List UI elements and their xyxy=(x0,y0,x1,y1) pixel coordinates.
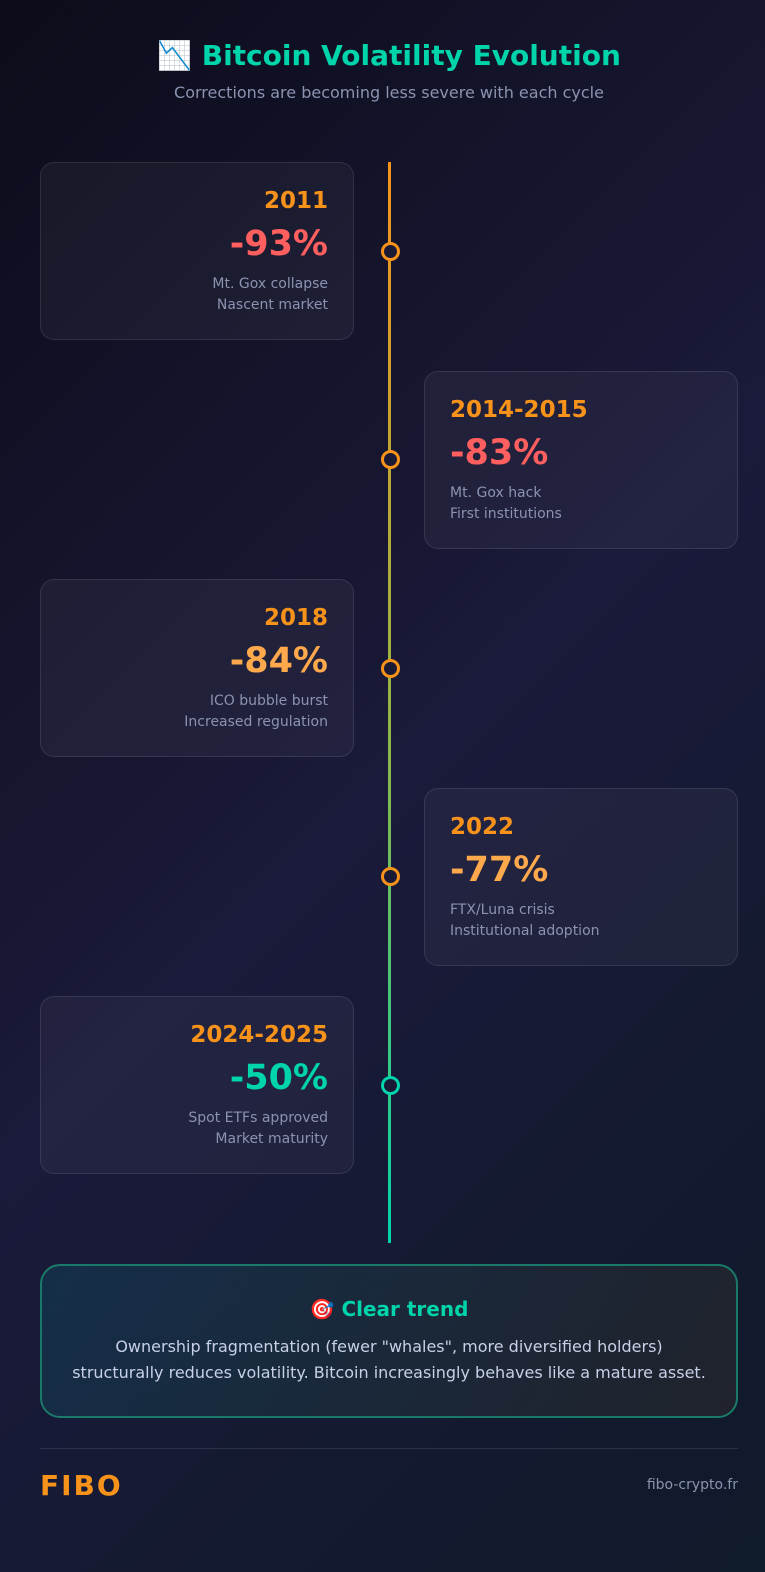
card: 2014-2015: First institutions xyxy=(450,506,562,522)
card: 2024-2025 xyxy=(40,996,354,1174)
footer url: fibo-crypto.fr xyxy=(647,1477,738,1493)
callout: clear trend xyxy=(40,1264,738,1418)
dot 2022 xyxy=(381,867,400,886)
title: 📉 Bitcoin Volatility Evolution xyxy=(157,39,621,72)
footer logo: FIBO xyxy=(40,1469,123,1502)
card: 2014-2015: Mt. Gox hack xyxy=(450,485,541,501)
card: 2018: ICO bubble burst xyxy=(210,693,328,709)
card: 2011 xyxy=(40,162,354,340)
card: 2022: Institutional adoption xyxy=(450,923,600,939)
callout text xyxy=(72,1337,706,1382)
card: 2011: -93% xyxy=(230,224,328,264)
subtitle: Corrections are becoming less severe with each cycle xyxy=(174,83,604,102)
callout text: structurally reduces volatility. Bitcoin increasingly behaves like a mature asset. xyxy=(72,1363,706,1382)
dot 2014 xyxy=(381,450,400,469)
card: 2022: FTX/Luna crisis xyxy=(450,902,555,918)
dot 2011 xyxy=(381,242,400,261)
dot 2024 xyxy=(381,1076,400,1095)
card: 2018: Increased regulation xyxy=(184,714,328,730)
card: 2014-2015 xyxy=(424,371,738,549)
card: 2022: -77% xyxy=(450,850,548,890)
card: 2011: Nascent market xyxy=(217,297,328,313)
dot 2018 xyxy=(381,659,400,678)
card: 2024-2025: 2024-2025 xyxy=(190,1022,328,1048)
card: 2014-2015: -83% xyxy=(450,433,548,473)
card: 2024-2025: Spot ETFs approved xyxy=(188,1110,328,1126)
card: 2022: 2022 xyxy=(450,814,514,840)
card: 2018: 2018 xyxy=(264,605,328,631)
callout text: Ownership fragmentation (fewer "whales", more diversified holders) xyxy=(115,1337,663,1356)
card: 2024-2025: Market maturity xyxy=(215,1131,328,1147)
callout title: 🎯 Clear trend xyxy=(310,1297,468,1321)
card: 2014-2015: 2014-2015 xyxy=(450,397,588,423)
timeline line xyxy=(388,162,391,1243)
card: 2011: Mt. Gox collapse xyxy=(212,276,328,292)
card: 2022 xyxy=(424,788,738,966)
card: 2018 xyxy=(40,579,354,757)
card: 2018: -84% xyxy=(230,641,328,681)
card: 2011: 2011 xyxy=(264,188,328,214)
card: 2024-2025: -50% xyxy=(230,1058,328,1098)
